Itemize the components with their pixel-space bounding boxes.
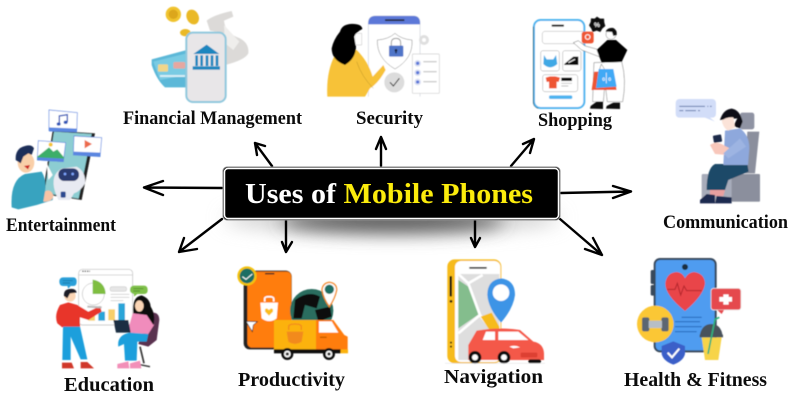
icon: communication [676, 99, 760, 203]
arrow to navigation [471, 220, 480, 247]
arrow to security [376, 137, 386, 166]
label: navigation: Navigation [444, 366, 543, 388]
label: financial management: Financial Management [123, 109, 303, 129]
arrow to entertainment [144, 181, 222, 195]
icon: entertainment [11, 110, 102, 209]
label: communication: Communication [663, 213, 789, 233]
icon: productivity [237, 266, 348, 360]
arrow to productivity [282, 220, 292, 252]
arrow to shopping [511, 139, 534, 166]
arrow to financial management [255, 143, 272, 166]
arrow to communication [561, 186, 631, 198]
label: shopping: Shopping [538, 111, 613, 131]
icon: shopping [533, 17, 627, 109]
central title shadow [224, 205, 560, 233]
arrow to education [179, 219, 222, 252]
icon: health and fitness [637, 259, 741, 365]
icon: education [56, 269, 159, 368]
icon: financial management [152, 7, 248, 102]
icon: security [327, 16, 439, 97]
arrow to health and fitness [560, 219, 602, 255]
label: security: Security [356, 109, 424, 129]
label: health and fitness: Health & Fitness [624, 369, 767, 391]
icon: navigation [445, 259, 545, 364]
label: entertainment: Entertainment [6, 216, 117, 236]
icon: shopping: % [594, 22, 600, 29]
title box [223, 167, 560, 220]
label: education: Education [64, 374, 155, 396]
title text: Uses of Mobile Phones [245, 178, 533, 210]
label: productivity: Productivity [238, 369, 345, 391]
